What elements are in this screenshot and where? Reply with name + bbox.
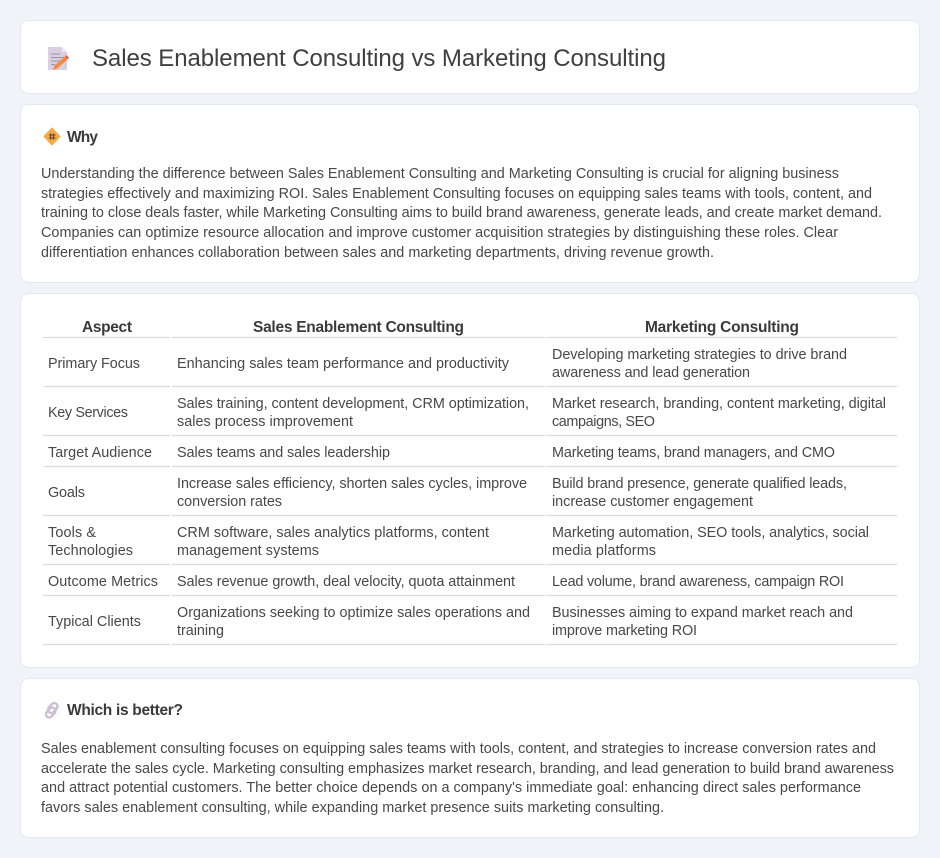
row: primary focus: Primary Focus <box>48 356 140 372</box>
which is better paragraph: favors sales enablement consulting, while expanding market presence suits marketing consulting. <box>41 800 664 816</box>
title: Sales Enablement Consulting vs Marketing Consulting <box>92 45 666 72</box>
icon: chain link <box>45 702 59 719</box>
heading: why: Why <box>67 129 98 146</box>
which is better paragraph: Sales enablement consulting focuses on equipping sales teams with tools, content, and strategies to increase conversion rates and <box>41 741 876 757</box>
panel: which is better <box>20 678 920 838</box>
row: key services <box>48 396 886 430</box>
row: goals: Build brand presence, generate qualified leads, <box>552 476 847 492</box>
row: key services: campaigns, SEO <box>552 414 655 430</box>
row: target audience: Sales teams and sales leadership <box>177 445 390 461</box>
row: tools and technologies <box>48 525 869 559</box>
row: primary focus: Developing marketing strategies to drive brand <box>552 347 847 363</box>
why paragraph: Understanding the difference between Sales Enablement Consulting and Marketing Consulting is crucial for aligning business <box>41 166 839 182</box>
row: tools and technologies: Technologies <box>48 543 133 559</box>
table header row: Aspect <box>82 319 132 336</box>
why paragraph: strategies effectively and maximizing ROI. Sales Enablement Consulting focuses on equipping sales teams with tools, content, and <box>41 186 872 202</box>
row: typical clients: Typical Clients <box>48 614 141 630</box>
row: tools and technologies: management systems <box>177 543 319 559</box>
table header row: Marketing Consulting <box>645 319 799 336</box>
panel: why <box>20 104 920 282</box>
row: tools and technologies: Marketing automation, SEO tools, analytics, social <box>552 525 869 541</box>
row: tools and technologies: CRM software, sales analytics platforms, content <box>177 525 489 541</box>
row: target audience <box>48 445 835 461</box>
row: target audience: Target Audience <box>48 445 152 461</box>
row: outcome metrics: Sales revenue growth, deal velocity, quota attainment <box>177 574 515 590</box>
row: goals: Increase sales efficiency, shorten sales cycles, improve <box>177 476 527 492</box>
table header row <box>82 319 799 336</box>
why paragraph: training to close deals faster, while Marketing Consulting aims to build brand awareness, generate leads, and create market demand. <box>41 205 882 221</box>
why paragraph: Companies can optimize resource allocation and improve customer acquisition strategies by distinguishing these roles. Clear <box>41 225 838 241</box>
which is better paragraph <box>41 741 894 816</box>
heading: which is better: Which is better? <box>67 702 183 719</box>
row: typical clients: Organizations seeking to optimize sales operations and <box>177 605 530 621</box>
row: typical clients: Businesses aiming to expand market reach and <box>552 605 853 621</box>
which is better paragraph: and attract potential customers. The better choice depends on a company's immediate goal: enhancing direct sales performance <box>41 780 861 796</box>
row: primary focus <box>48 347 847 381</box>
row: key services: Key Services <box>48 405 128 421</box>
which is better paragraph: accelerate the sales cycle. Marketing consulting emphasizes market research, branding, and lead generation to build brand awareness <box>41 761 894 777</box>
row: key services: sales process improvement <box>177 414 353 430</box>
row: key services: Sales training, content development, CRM optimization, <box>177 396 529 412</box>
panel: comparison table <box>20 294 920 668</box>
row: outcome metrics: Lead volume, brand awareness, campaign ROI <box>552 574 844 590</box>
row: typical clients: training <box>177 623 224 639</box>
row: outcome metrics: Outcome Metrics <box>48 574 158 590</box>
row: typical clients: improve marketing ROI <box>552 623 697 639</box>
table header row: Sales Enablement Consulting <box>253 319 464 336</box>
row: typical clients <box>48 605 853 639</box>
row: goals <box>48 476 847 510</box>
row: primary focus: Enhancing sales team performance and productivity <box>177 356 510 372</box>
why paragraph <box>41 166 882 261</box>
row: goals: increase customer engagement <box>552 494 753 510</box>
row: tools and technologies: media platforms <box>552 543 656 559</box>
row: outcome metrics <box>48 574 844 590</box>
row: goals: Goals <box>48 485 85 501</box>
panel: title header <box>20 20 920 94</box>
row: primary focus: awareness and lead generation <box>552 365 750 381</box>
row: target audience: Marketing teams, brand managers, and CMO <box>552 445 835 461</box>
row: key services: Market research, branding, content marketing, digital <box>552 396 886 412</box>
why paragraph: differentiation enhances collaboration between sales and marketing departments, driving revenue growth. <box>41 245 714 261</box>
icon: warning diamond <box>44 128 60 145</box>
icon: document with pencil <box>48 47 69 70</box>
row: goals: conversion rates <box>177 494 282 510</box>
row: tools and technologies: Tools & <box>48 525 96 541</box>
